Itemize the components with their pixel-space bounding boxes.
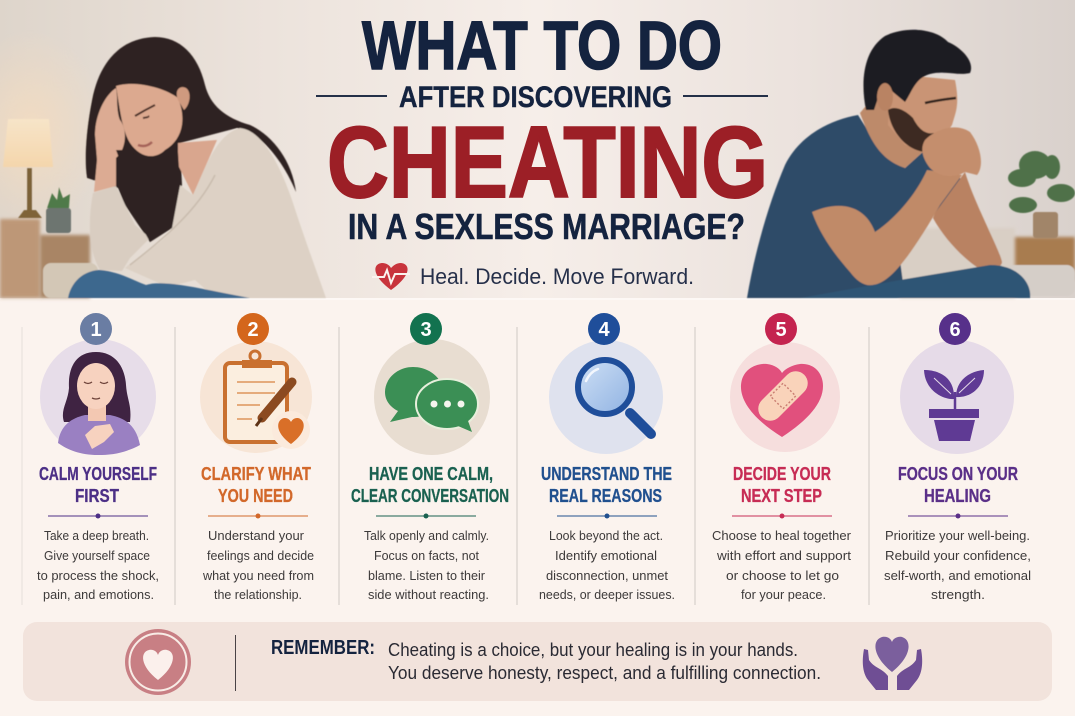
icon: potted plant (900, 340, 1014, 454)
heading (201, 464, 311, 506)
description: Talk openly and calmly. (364, 528, 489, 543)
description (712, 528, 852, 602)
heading: UNDERSTAND THE (541, 464, 672, 484)
heading: NEXT STEP (741, 486, 822, 506)
description: needs, or deeper issues. (539, 587, 675, 602)
column dividers (22, 327, 869, 605)
description: pain, and emotions. (43, 587, 154, 602)
heading: CALM YOURSELF (39, 464, 157, 484)
heading (541, 464, 672, 506)
step 3: have one calm, clear conversation (351, 313, 509, 602)
photo: sad woman in living room (0, 30, 326, 298)
title (316, 7, 768, 247)
description: Give yourself space (44, 548, 150, 563)
heading: FIRST (75, 486, 119, 506)
number badge 1 (80, 313, 112, 345)
description (37, 528, 159, 602)
description: self-worth, and emotional (884, 568, 1031, 583)
description (202, 528, 314, 602)
description: Look beyond the act. (549, 528, 663, 543)
description: side without reacting. (368, 587, 489, 602)
icon: speech bubbles (374, 339, 490, 455)
hero background (0, 0, 1075, 300)
description: Identify emotional (555, 548, 657, 563)
description: disconnection, unmet (546, 568, 668, 583)
icon: magnifying glass (549, 340, 663, 454)
number badge 5: 5 (775, 319, 787, 341)
description: Prioritize your well-being. (885, 528, 1030, 543)
photo: worried man on sofa (747, 30, 1075, 298)
separator (48, 514, 148, 518)
number badge 4: 4 (598, 319, 610, 341)
heading: CLARIFY WHAT (201, 464, 311, 484)
icon: clipboard with pen and heart (200, 341, 312, 453)
description: or choose to let go (726, 568, 839, 583)
title line: what to do: WHAT TO DO (362, 7, 722, 84)
number badge 5 (765, 313, 797, 345)
description (884, 528, 1031, 602)
number badge 3 (410, 313, 442, 345)
heading (898, 464, 1018, 506)
separator (208, 514, 308, 518)
step 2: clarify what you need (200, 313, 314, 602)
description: to process the shock, (37, 568, 159, 583)
heading (351, 464, 509, 506)
heading (733, 464, 831, 506)
description: with effort and support (716, 548, 851, 563)
remember text: REMEMBER: (271, 637, 375, 659)
number badge 6: 6 (949, 319, 961, 341)
heading: REAL REASONS (549, 486, 662, 506)
description (539, 528, 675, 602)
number badge 3: 3 (420, 319, 432, 341)
description: Understand your (208, 528, 305, 543)
title line: after discovering: AFTER DISCOVERING (399, 81, 672, 114)
description: what you need from (202, 568, 314, 583)
tagline: Heal. Decide. Move Forward. (420, 264, 694, 289)
heading: YOU NEED (218, 486, 293, 506)
separator (732, 514, 832, 518)
description: blame. Listen to their (368, 568, 486, 583)
description: the relationship. (214, 587, 302, 602)
icon: heartbeat heart (372, 263, 410, 290)
number badge 2 (237, 313, 269, 345)
description: Rebuild your confidence, (885, 548, 1031, 563)
remember text: Cheating is a choice, but your healing is in your hands. (388, 640, 798, 660)
step 6: focus on your healing (884, 313, 1031, 602)
description: Focus on facts, not (374, 548, 479, 563)
remember banner (23, 622, 1052, 701)
step 4: understand the real reasons (539, 313, 675, 602)
description: Choose to heal together (712, 528, 852, 543)
description: feelings and decide (207, 548, 314, 563)
title line: cheating: CHEATING (327, 107, 768, 219)
description: strength. (931, 587, 985, 602)
step 1: calm yourself first (37, 313, 159, 602)
description: Take a deep breath. (44, 528, 149, 543)
heading: FOCUS ON YOUR (898, 464, 1018, 484)
icon: heart badge (125, 629, 191, 695)
icon: hands holding heart (863, 637, 922, 690)
separator (557, 514, 657, 518)
heading: HAVE ONE CALM, (369, 464, 493, 484)
step 5: decide your next step (712, 313, 852, 602)
heading: HEALING (924, 486, 991, 506)
remember text (271, 637, 821, 683)
title line: in a sexless marriage: IN A SEXLESS MARRIAGE? (348, 206, 745, 247)
number badge 2: 2 (247, 319, 259, 341)
number badge 4 (588, 313, 620, 345)
description: for your peace. (741, 587, 826, 602)
number badge 1: 1 (90, 319, 102, 341)
heading (39, 464, 157, 506)
heading: CLEAR CONVERSATION (351, 486, 509, 506)
separator (908, 514, 1008, 518)
description (364, 528, 489, 602)
icon: heart with bandage (730, 342, 840, 452)
heading: DECIDE YOUR (733, 464, 831, 484)
icon: calm woman (40, 339, 156, 455)
remember text: You deserve honesty, respect, and a fulfilling connection. (388, 663, 821, 683)
number badge 6 (939, 313, 971, 345)
separator (376, 514, 476, 518)
